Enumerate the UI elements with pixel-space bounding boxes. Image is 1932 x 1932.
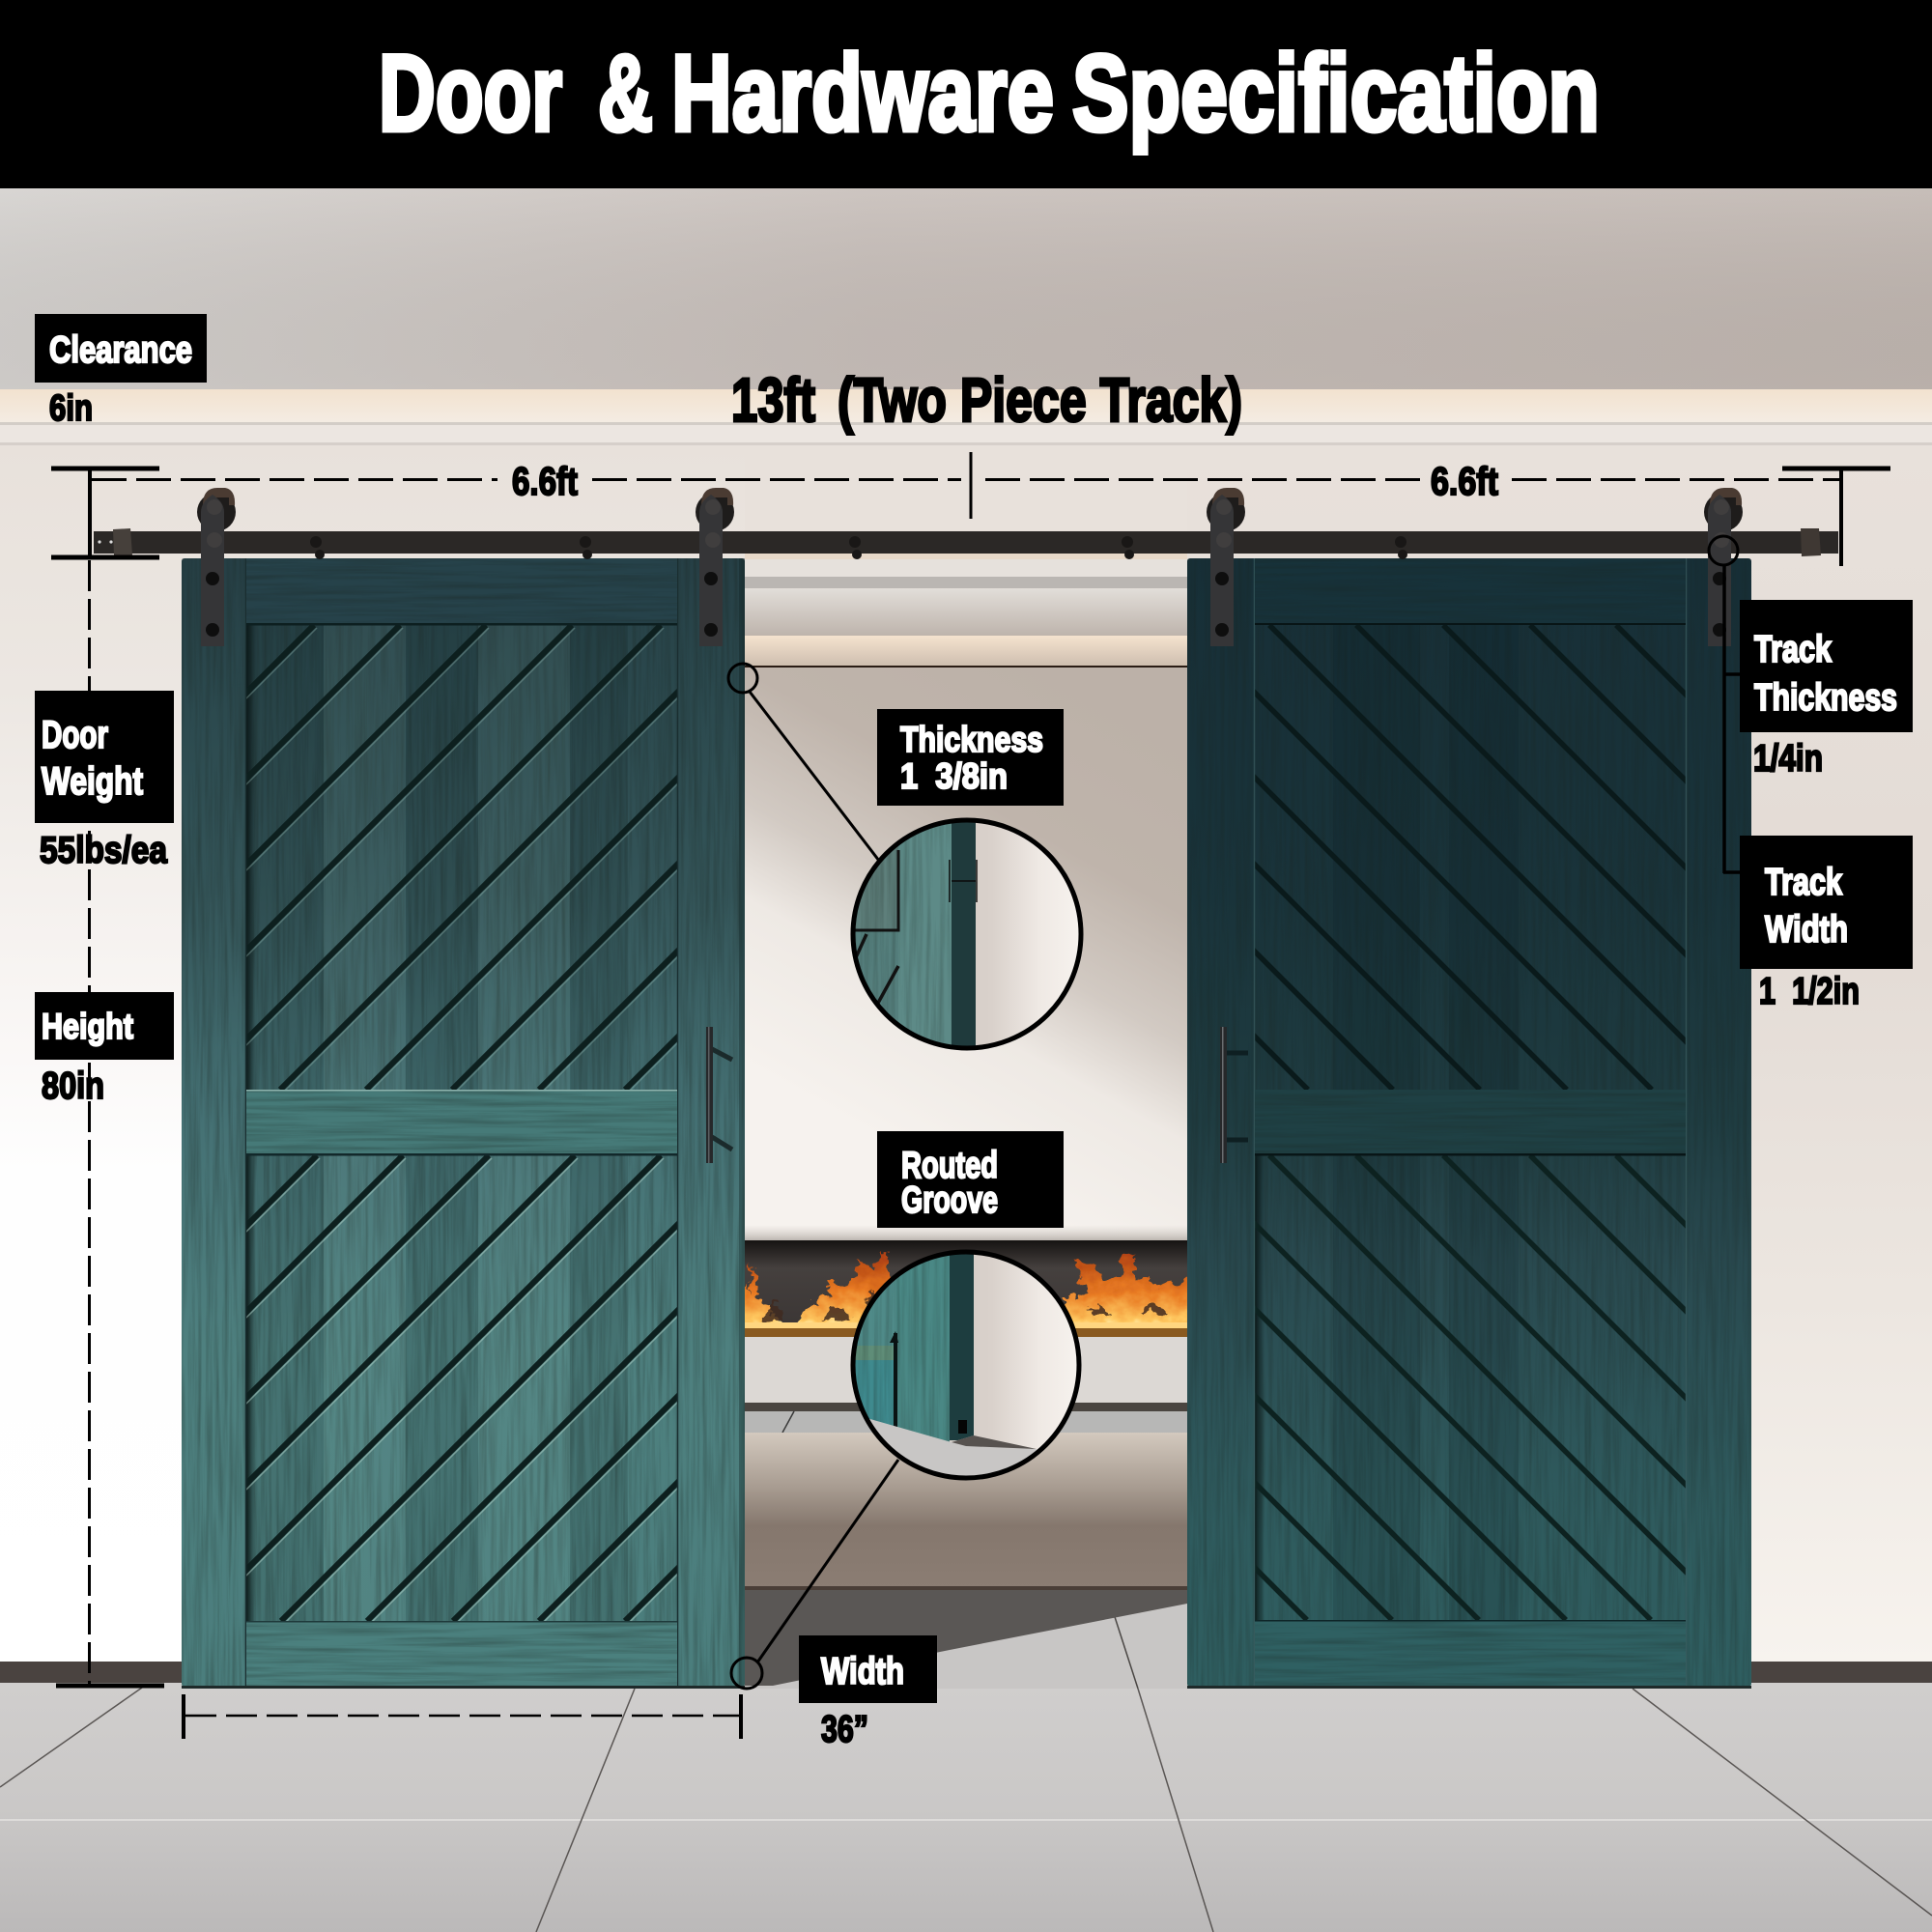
width marker and leader	[731, 1460, 898, 1689]
thickness callout: Thickness	[900, 720, 1043, 759]
top rail	[1255, 558, 1686, 625]
middle rail	[1255, 1090, 1686, 1155]
door weight callout	[35, 691, 174, 871]
half track label left: 6.6ft	[512, 459, 578, 503]
roller hanger 4	[1704, 488, 1743, 646]
fireplace flames	[745, 1251, 1187, 1328]
doorway interior scene	[734, 558, 1198, 1689]
width callout: 36”	[821, 1709, 868, 1750]
plank bands	[246, 625, 628, 1621]
width callout	[799, 1635, 937, 1750]
routed groove callout: Groove	[901, 1179, 998, 1221]
track thickness callout	[1740, 600, 1913, 780]
width callout: Width	[821, 1651, 904, 1692]
track stop left	[113, 528, 132, 555]
roller hanger 3	[1207, 488, 1245, 646]
middle rail	[246, 1090, 677, 1155]
magnifier: door thickness detail	[850, 817, 1087, 1054]
height dimension line	[51, 469, 164, 1686]
title	[379, 33, 1600, 154]
right door	[1187, 558, 1751, 1689]
stile seams	[245, 558, 678, 1687]
cove light strip	[0, 389, 1932, 423]
thickness callout: 1 3/8in	[900, 756, 1008, 796]
left door	[182, 558, 745, 1689]
bottom rail	[1255, 1620, 1686, 1687]
grooves upper panel	[1255, 625, 1686, 1090]
magnifier: routed groove detail	[850, 1249, 1087, 1483]
title banner	[0, 0, 1932, 188]
track length dimension lines	[92, 452, 1890, 566]
right door handle	[1220, 1027, 1248, 1163]
track width callout	[1740, 836, 1913, 1012]
clearance callout	[35, 314, 207, 429]
height callout: 80in	[42, 1065, 104, 1107]
track total label: 13ft	[731, 365, 815, 435]
title: Hardware	[671, 33, 1054, 154]
door weight callout: Door	[42, 714, 108, 756]
roller hanger 2	[696, 488, 734, 646]
grooves upper panel	[246, 626, 677, 1090]
bottom rail	[246, 1621, 677, 1687]
routed groove callout	[877, 1131, 1064, 1228]
ceiling	[0, 188, 1932, 389]
door weight callout: Weight	[42, 760, 143, 803]
thickness marker and leader	[728, 664, 879, 861]
track thickness and width leader	[1709, 536, 1741, 873]
floor	[0, 1683, 1932, 1932]
clearance callout: 6in	[49, 388, 93, 429]
track thickness callout: 1/4in	[1753, 738, 1823, 780]
roller hanger 1	[197, 488, 236, 646]
left wall	[0, 445, 745, 1662]
title: Specification	[1072, 33, 1600, 154]
track stop right	[1801, 528, 1821, 556]
grooves lower panel	[1257, 1155, 1686, 1620]
grooves lower panel	[246, 1155, 677, 1621]
right wall	[1187, 445, 1932, 1662]
title: Door	[379, 33, 562, 154]
wall above door opening	[745, 445, 1187, 561]
track total label: (Two Piece Track)	[838, 365, 1242, 435]
clearance callout: Clearance	[49, 329, 192, 371]
track width callout: Track	[1765, 862, 1842, 903]
title: &	[598, 33, 653, 154]
track total label	[731, 365, 1242, 435]
track width callout: 1 1/2in	[1759, 971, 1860, 1012]
routed groove callout: Routed	[901, 1145, 998, 1186]
thickness callout	[877, 709, 1064, 806]
track mounting bolts	[310, 536, 1407, 559]
half track label right: 6.6ft	[1431, 459, 1498, 503]
track thickness callout: Track	[1754, 629, 1832, 670]
door weight callout: 55lbs/ea	[40, 830, 167, 871]
height callout	[35, 992, 174, 1107]
crown moulding	[0, 425, 1932, 442]
height callout: Height	[42, 1007, 133, 1046]
baseboard	[0, 1662, 1932, 1683]
left door handle	[706, 1027, 732, 1163]
door width dimension line	[184, 1694, 741, 1739]
sliding track rail	[94, 528, 1838, 559]
top rail	[246, 558, 677, 626]
track width callout: Width	[1765, 909, 1848, 951]
